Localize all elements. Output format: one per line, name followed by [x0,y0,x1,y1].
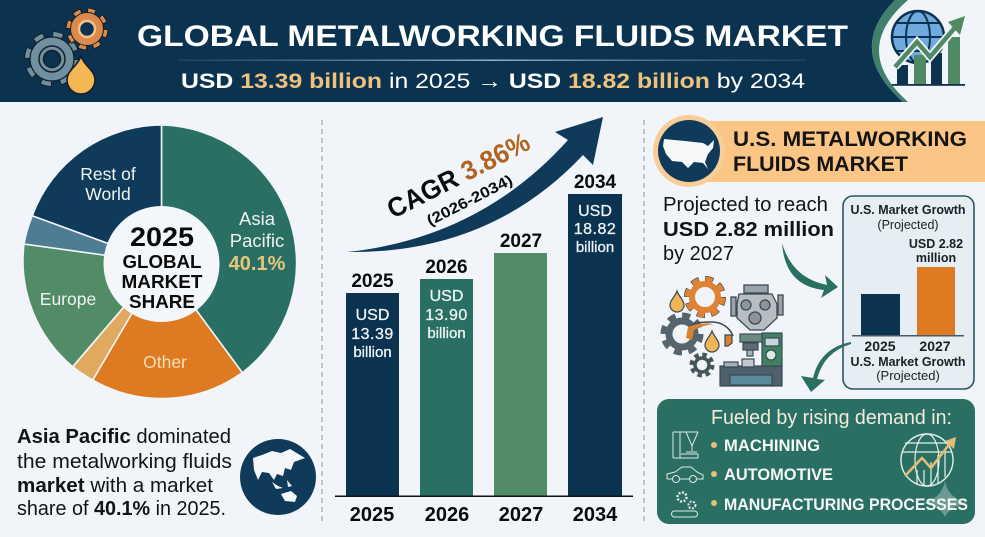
center circle [104,206,220,322]
text: Asia Pacific summary [17,426,232,520]
item: automotive: AUTOMOTIVE [724,466,833,484]
panel: U.S. market growth chart: U.S. Market Growth [850,203,966,217]
engine [731,285,783,330]
pie segment labels: World [85,184,131,204]
arrow: to demand panel [801,342,851,392]
bar 2026: billion [427,325,466,342]
bar 2027: 2027 [500,231,542,252]
text: Asia Pacific summary: the metalworking fluids [17,451,232,473]
bar 2025: 13.39 [351,326,394,343]
pie center label: GLOBAL [122,252,202,272]
bar 2025: billion [353,344,392,361]
text: projected to reach: USD 2.82 million [663,219,834,241]
growth arrow [347,117,603,252]
bar 2025: USD [356,307,389,324]
heading text: U.S. METALWORKING [733,128,967,151]
text: Asia Pacific summary: share of 40.1% in 2025. [17,498,226,520]
bar 2026: 2026 [425,257,468,278]
icon: globe and growth chart [892,11,965,86]
orange gear [687,279,723,315]
text: Asia Pacific summary: market with a market [17,475,213,497]
x-axis year labels: 2027 [499,504,543,526]
bar: 2025 [861,294,900,336]
panel: U.S. market growth chart: (Projected) [877,218,939,232]
title: GLOBAL METALWORKING FLUIDS MARKET [137,20,848,53]
item: manufacturing processes: MANUFACTURING PROCESSES [724,496,968,514]
bar 2026: USD [430,288,463,305]
header banner [0,0,965,102]
panel: rising demand [657,399,975,524]
panel: U.S. market heading [653,115,985,187]
icon: gears and oil drop [28,11,105,94]
sparkle [923,481,967,517]
bar 2034: 2034 [574,172,617,193]
pie segment labels: Other [143,352,187,372]
pie segment labels: Europe [40,289,96,309]
panel: U.S. market growth chart: 2027 [919,338,951,354]
item: manufacturing processes [672,492,968,517]
machine tool [720,333,782,386]
dark gear [664,316,700,352]
oil drops [670,291,719,352]
pie segment labels [40,164,286,372]
pie chart: 2025 global market share [23,125,297,399]
x-axis year labels: 2025 [350,504,394,526]
icon: U.S. map [663,139,714,169]
text: projected to reach [663,194,834,265]
bar 2026 [420,257,473,496]
item: machining [673,432,820,458]
panel: U.S. market growth chart: U.S. Market Growth [850,354,966,369]
pipe [688,322,733,336]
item: machining: MACHINING [724,437,820,455]
pie center label: MARKET [122,272,202,292]
text: Asia Pacific summary: Asia Pacific dominated [17,426,231,448]
panel: U.S. market growth chart: million [916,251,956,265]
bar 2034: USD [578,203,612,220]
pie segment labels: Pacific [230,230,284,251]
pie center label [122,222,202,312]
item: automotive [667,466,833,484]
pie segment labels: 40.1% [229,253,286,275]
panel heading: Fueled by rising demand in: [711,407,952,429]
heading text [733,128,967,176]
bar 2027 [494,231,547,496]
pie segment labels: Asia [239,208,276,229]
bar 2034: billion [576,239,614,256]
bar 2025 [346,271,399,496]
arrow: to U.S. chart [782,243,838,298]
pie center label: 2025 [130,222,194,252]
text: projected to reach: by 2027 [663,243,734,265]
panel: U.S. market growth chart [843,196,974,389]
bar 2034: 18.82 [574,221,616,238]
icon: global growth [901,434,956,486]
CAGR label: (2026-2034) [424,172,516,230]
pie center label: SHARE [129,292,195,312]
subtitle: USD 13.39 billion in 2025 → USD 18.82 billion by 2034 [181,70,805,93]
x-axis year labels [350,504,618,526]
bar 2034 [568,172,622,496]
bar: 2027 [917,267,955,336]
panel: U.S. market growth chart: USD 2.82 [909,237,963,251]
text: projected to reach: Projected to reach [663,194,828,216]
CAGR label: CAGR 3.86% [382,127,535,224]
panel: U.S. market growth chart: 2025 [864,338,896,354]
x-axis year labels: 2026 [425,504,469,526]
bar 2025: 2025 [351,271,394,292]
panel: market growth bar chart [322,117,644,526]
pie segment labels: Rest of [80,164,136,184]
panel: U.S. market growth chart: (Projected) [876,368,940,383]
heading text: FLUIDS MARKET [733,153,908,176]
bar 2026: 13.90 [425,307,468,324]
small gear [692,354,712,376]
icon: machinery and fluids [664,279,783,386]
icon: Asia Pacific globe [240,439,316,515]
x-axis year labels: 2034 [573,504,618,526]
